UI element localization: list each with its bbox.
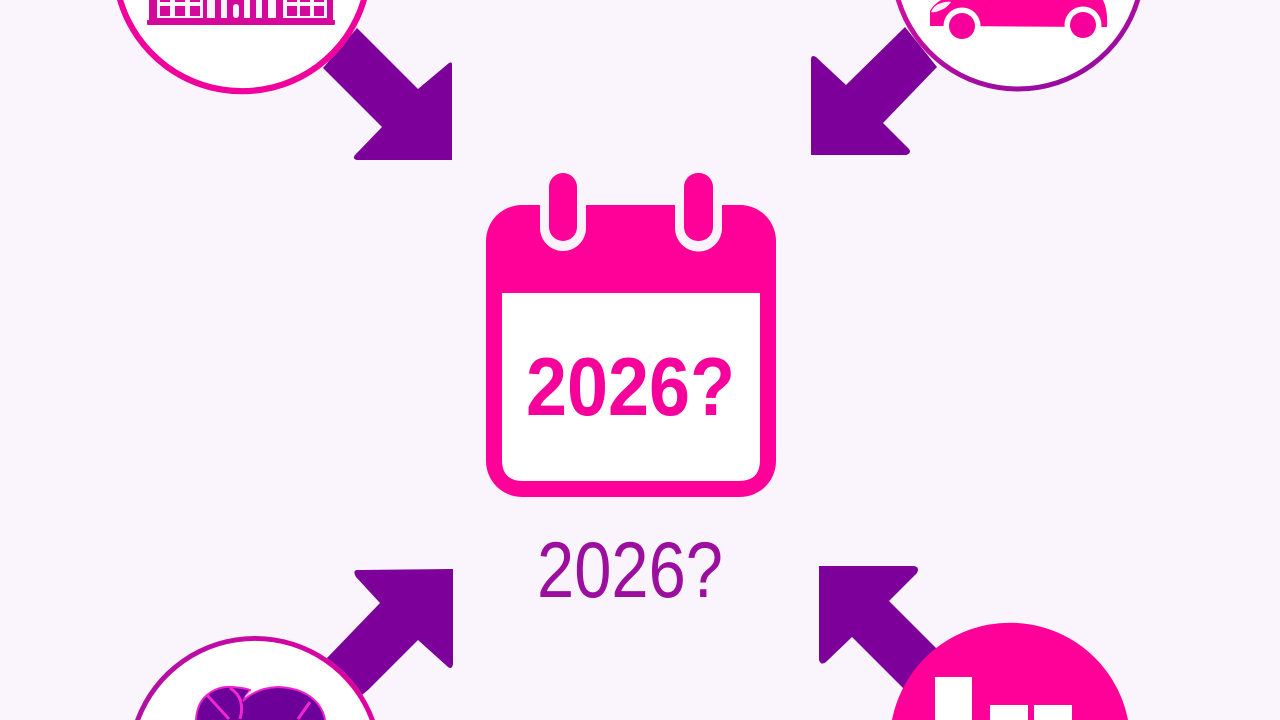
calendar ring left: [540, 173, 586, 251]
arrow: bottom-right to center: [819, 566, 940, 690]
icon: bar chart in circle (bottom right): [892, 623, 1128, 720]
icon: central calendar: [486, 173, 776, 497]
icon: car in circle (top right): [896, 0, 1140, 91]
arrow: top-left to center: [323, 28, 452, 160]
icon: heart-like globe in circle (bottom left): [135, 636, 375, 720]
arrow: bottom-left to center: [327, 569, 453, 705]
car body: [930, 0, 1107, 44]
calendar year label: 2026?: [526, 340, 735, 433]
icon: factory in circle (top left): [117, 0, 367, 94]
globe shape: [196, 687, 325, 720]
calendar ring right: [675, 173, 722, 252]
arrow: top-right to center: [811, 27, 937, 155]
factory building: [147, 0, 335, 25]
white bars: [935, 677, 1072, 720]
caption: 2026?: 2026?: [537, 525, 723, 614]
